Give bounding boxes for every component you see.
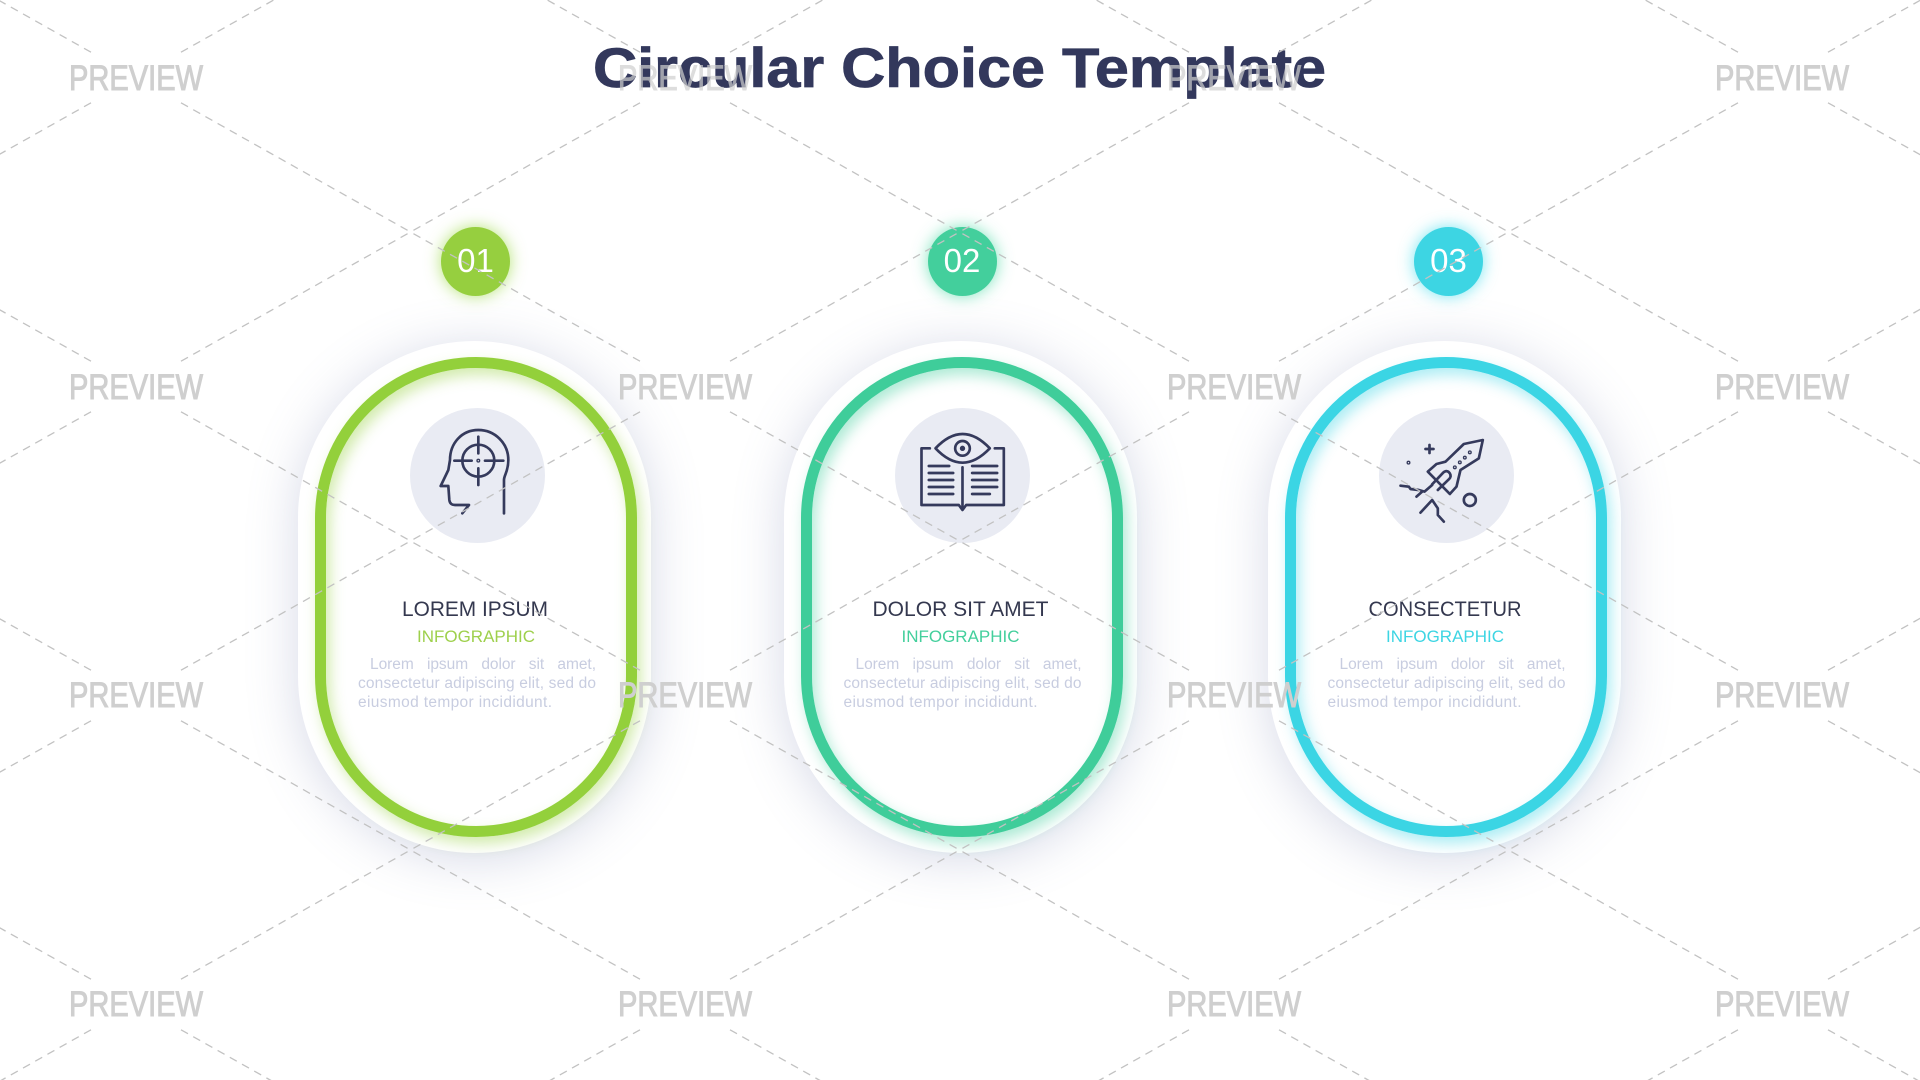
body text 3: Lorem ipsum dolor sit amet, [1339, 656, 1565, 673]
icon backdrop 2 [894, 408, 1030, 543]
body text 2 [843, 656, 1081, 711]
teal ring [800, 357, 1122, 837]
watermark labels: PREVIEW [1715, 59, 1849, 98]
panel: card 1 [278, 216, 671, 878]
panel: card 3 [1248, 216, 1641, 878]
cyan ring [1284, 357, 1606, 837]
outer white pill 1 [298, 341, 651, 853]
heading: dolor sit amet: DOLOR SIT AMET [872, 598, 1048, 621]
number badge 02: 02 [944, 242, 980, 279]
icon backdrop 1 [410, 408, 545, 543]
body text 2: eiusmod tempor incididunt. [843, 694, 1037, 711]
number badge 01: 01 [457, 242, 494, 279]
body text 2: consectetur adipiscing elit, sed do [843, 675, 1081, 692]
watermark labels: PREVIEW [69, 985, 203, 1024]
watermark labels: PREVIEW [69, 676, 203, 715]
body text 3: eiusmod tempor incididunt. [1327, 694, 1521, 711]
body text 2: Lorem ipsum dolor sit amet, [855, 656, 1081, 673]
watermark labels: PREVIEW [618, 368, 752, 407]
number badge 01 [441, 227, 510, 296]
body text 1: Lorem ipsum dolor sit amet, [370, 656, 596, 673]
icon: rocket [1400, 440, 1482, 522]
heading: lorem ipsum: LOREM IPSUM [402, 598, 548, 621]
number badge 03 [1414, 227, 1483, 296]
watermark labels: PREVIEW [1715, 368, 1849, 407]
watermark labels: PREVIEW [69, 368, 203, 407]
title: Circular Choice Template [593, 36, 1326, 99]
body text 1: consectetur adipiscing elit, sed do [358, 675, 596, 692]
body text 3 [1327, 656, 1565, 711]
watermark labels: PREVIEW [1167, 985, 1301, 1024]
body text 1: eiusmod tempor incididunt. [358, 694, 552, 711]
icon: open book with eye [921, 434, 1003, 510]
subheading: infographic: INFOGRAPHIC [417, 627, 535, 646]
outer white pill 2 [784, 341, 1136, 853]
watermark labels: PREVIEW [1167, 676, 1301, 715]
number badge 03: 03 [1430, 242, 1467, 279]
watermark labels: PREVIEW [618, 676, 752, 715]
green ring [315, 357, 637, 837]
subheading: infographic: INFOGRAPHIC [1386, 627, 1504, 646]
heading: consectetur: CONSECTETUR [1368, 598, 1521, 621]
outer white pill 3 [1268, 341, 1620, 853]
watermark labels: PREVIEW [1167, 368, 1301, 407]
number badge 02 [928, 227, 996, 296]
subheading: infographic: INFOGRAPHIC [901, 627, 1019, 646]
watermark labels: PREVIEW [1715, 676, 1849, 715]
panel: card 2 [764, 216, 1157, 878]
watermark labels: PREVIEW [1715, 985, 1849, 1024]
watermark labels: PREVIEW [618, 985, 752, 1024]
watermark labels: PREVIEW [618, 59, 752, 98]
body text 1 [358, 656, 596, 711]
watermark labels: PREVIEW [69, 59, 203, 98]
icon: head with crosshair [441, 430, 508, 513]
watermark labels: PREVIEW [1167, 59, 1301, 98]
body text 3: consectetur adipiscing elit, sed do [1327, 675, 1565, 692]
icon backdrop 3 [1379, 408, 1514, 543]
